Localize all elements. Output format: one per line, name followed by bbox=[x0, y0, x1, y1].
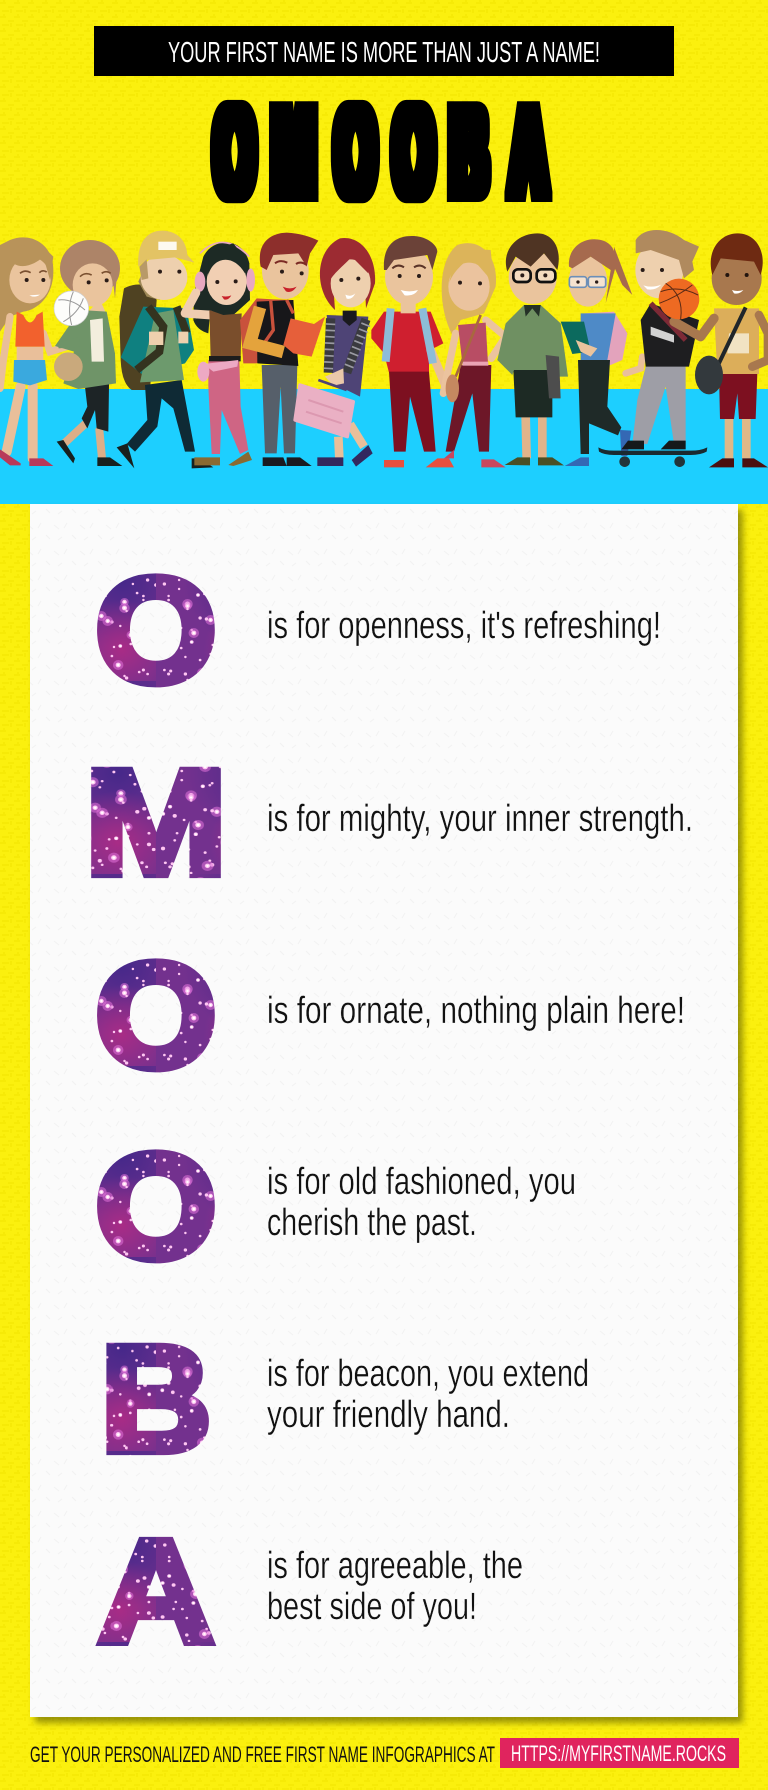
person: boy with glasses and green sweater bbox=[497, 233, 568, 465]
person: skater with basketball bbox=[598, 230, 707, 467]
row: letter O, old fashioned bbox=[96, 1124, 576, 1288]
beacon text: your friendly hand. bbox=[267, 1394, 510, 1436]
header banner bbox=[94, 26, 674, 76]
title: name: OMOOBA bbox=[215, 78, 547, 226]
person: blonde girl with shoulder bag bbox=[442, 243, 506, 467]
old fashioned text: is for old fashioned, you bbox=[267, 1161, 576, 1203]
openness text: is for openness, it's refreshing! bbox=[267, 605, 661, 647]
galaxy letter O: O bbox=[96, 548, 216, 712]
person: red-haired girl with pink bag bbox=[295, 238, 375, 467]
row: letter O, ornate bbox=[96, 933, 685, 1097]
agreeable text: best side of you! bbox=[267, 1586, 477, 1628]
row: letter O, openness bbox=[96, 548, 661, 712]
galaxy letter M: M bbox=[84, 739, 228, 907]
row: letter M, mighty bbox=[84, 739, 693, 907]
row: letter B, beacon bbox=[100, 1315, 589, 1484]
person: girl in orange top bbox=[0, 237, 79, 466]
person: boy with orange book bbox=[240, 233, 325, 466]
skateboard bbox=[598, 447, 707, 467]
illustration: group of young people, left half bbox=[0, 231, 375, 468]
galaxy letter A: A bbox=[98, 1509, 214, 1673]
person: girl with pink headphones bbox=[185, 242, 255, 466]
illustration: group of young people, right half bbox=[371, 230, 768, 467]
galaxy letter O: O bbox=[96, 933, 216, 1097]
old fashioned text bbox=[267, 1161, 576, 1244]
person: girl with ponytail and pink backpack bbox=[561, 239, 632, 466]
main white panel bbox=[30, 504, 738, 1717]
person: boy in yellow tank with shoulder bag bbox=[659, 233, 768, 467]
person: boy in red tee with blue backpack bbox=[371, 236, 454, 467]
row: letter A, agreeable bbox=[98, 1509, 523, 1673]
blue floor band bbox=[0, 389, 768, 504]
beacon text bbox=[267, 1353, 589, 1436]
old fashioned text: cherish the past. bbox=[267, 1202, 477, 1244]
person: backpacker with yellow cap bbox=[117, 231, 213, 468]
agreeable text: is for agreeable, the bbox=[267, 1545, 523, 1587]
person: girl in green jacket with volleyball bbox=[54, 240, 122, 466]
agreeable text bbox=[267, 1545, 523, 1628]
beacon text: is for beacon, you extend bbox=[267, 1353, 589, 1395]
footer call to action: GET YOUR PERSONALIZED AND FREE FIRST NAME INFOGRAPHICS AT bbox=[30, 1742, 495, 1767]
galaxy letter B: B bbox=[100, 1315, 212, 1484]
basketball bbox=[659, 279, 699, 319]
galaxy letter O: O bbox=[96, 1124, 216, 1288]
